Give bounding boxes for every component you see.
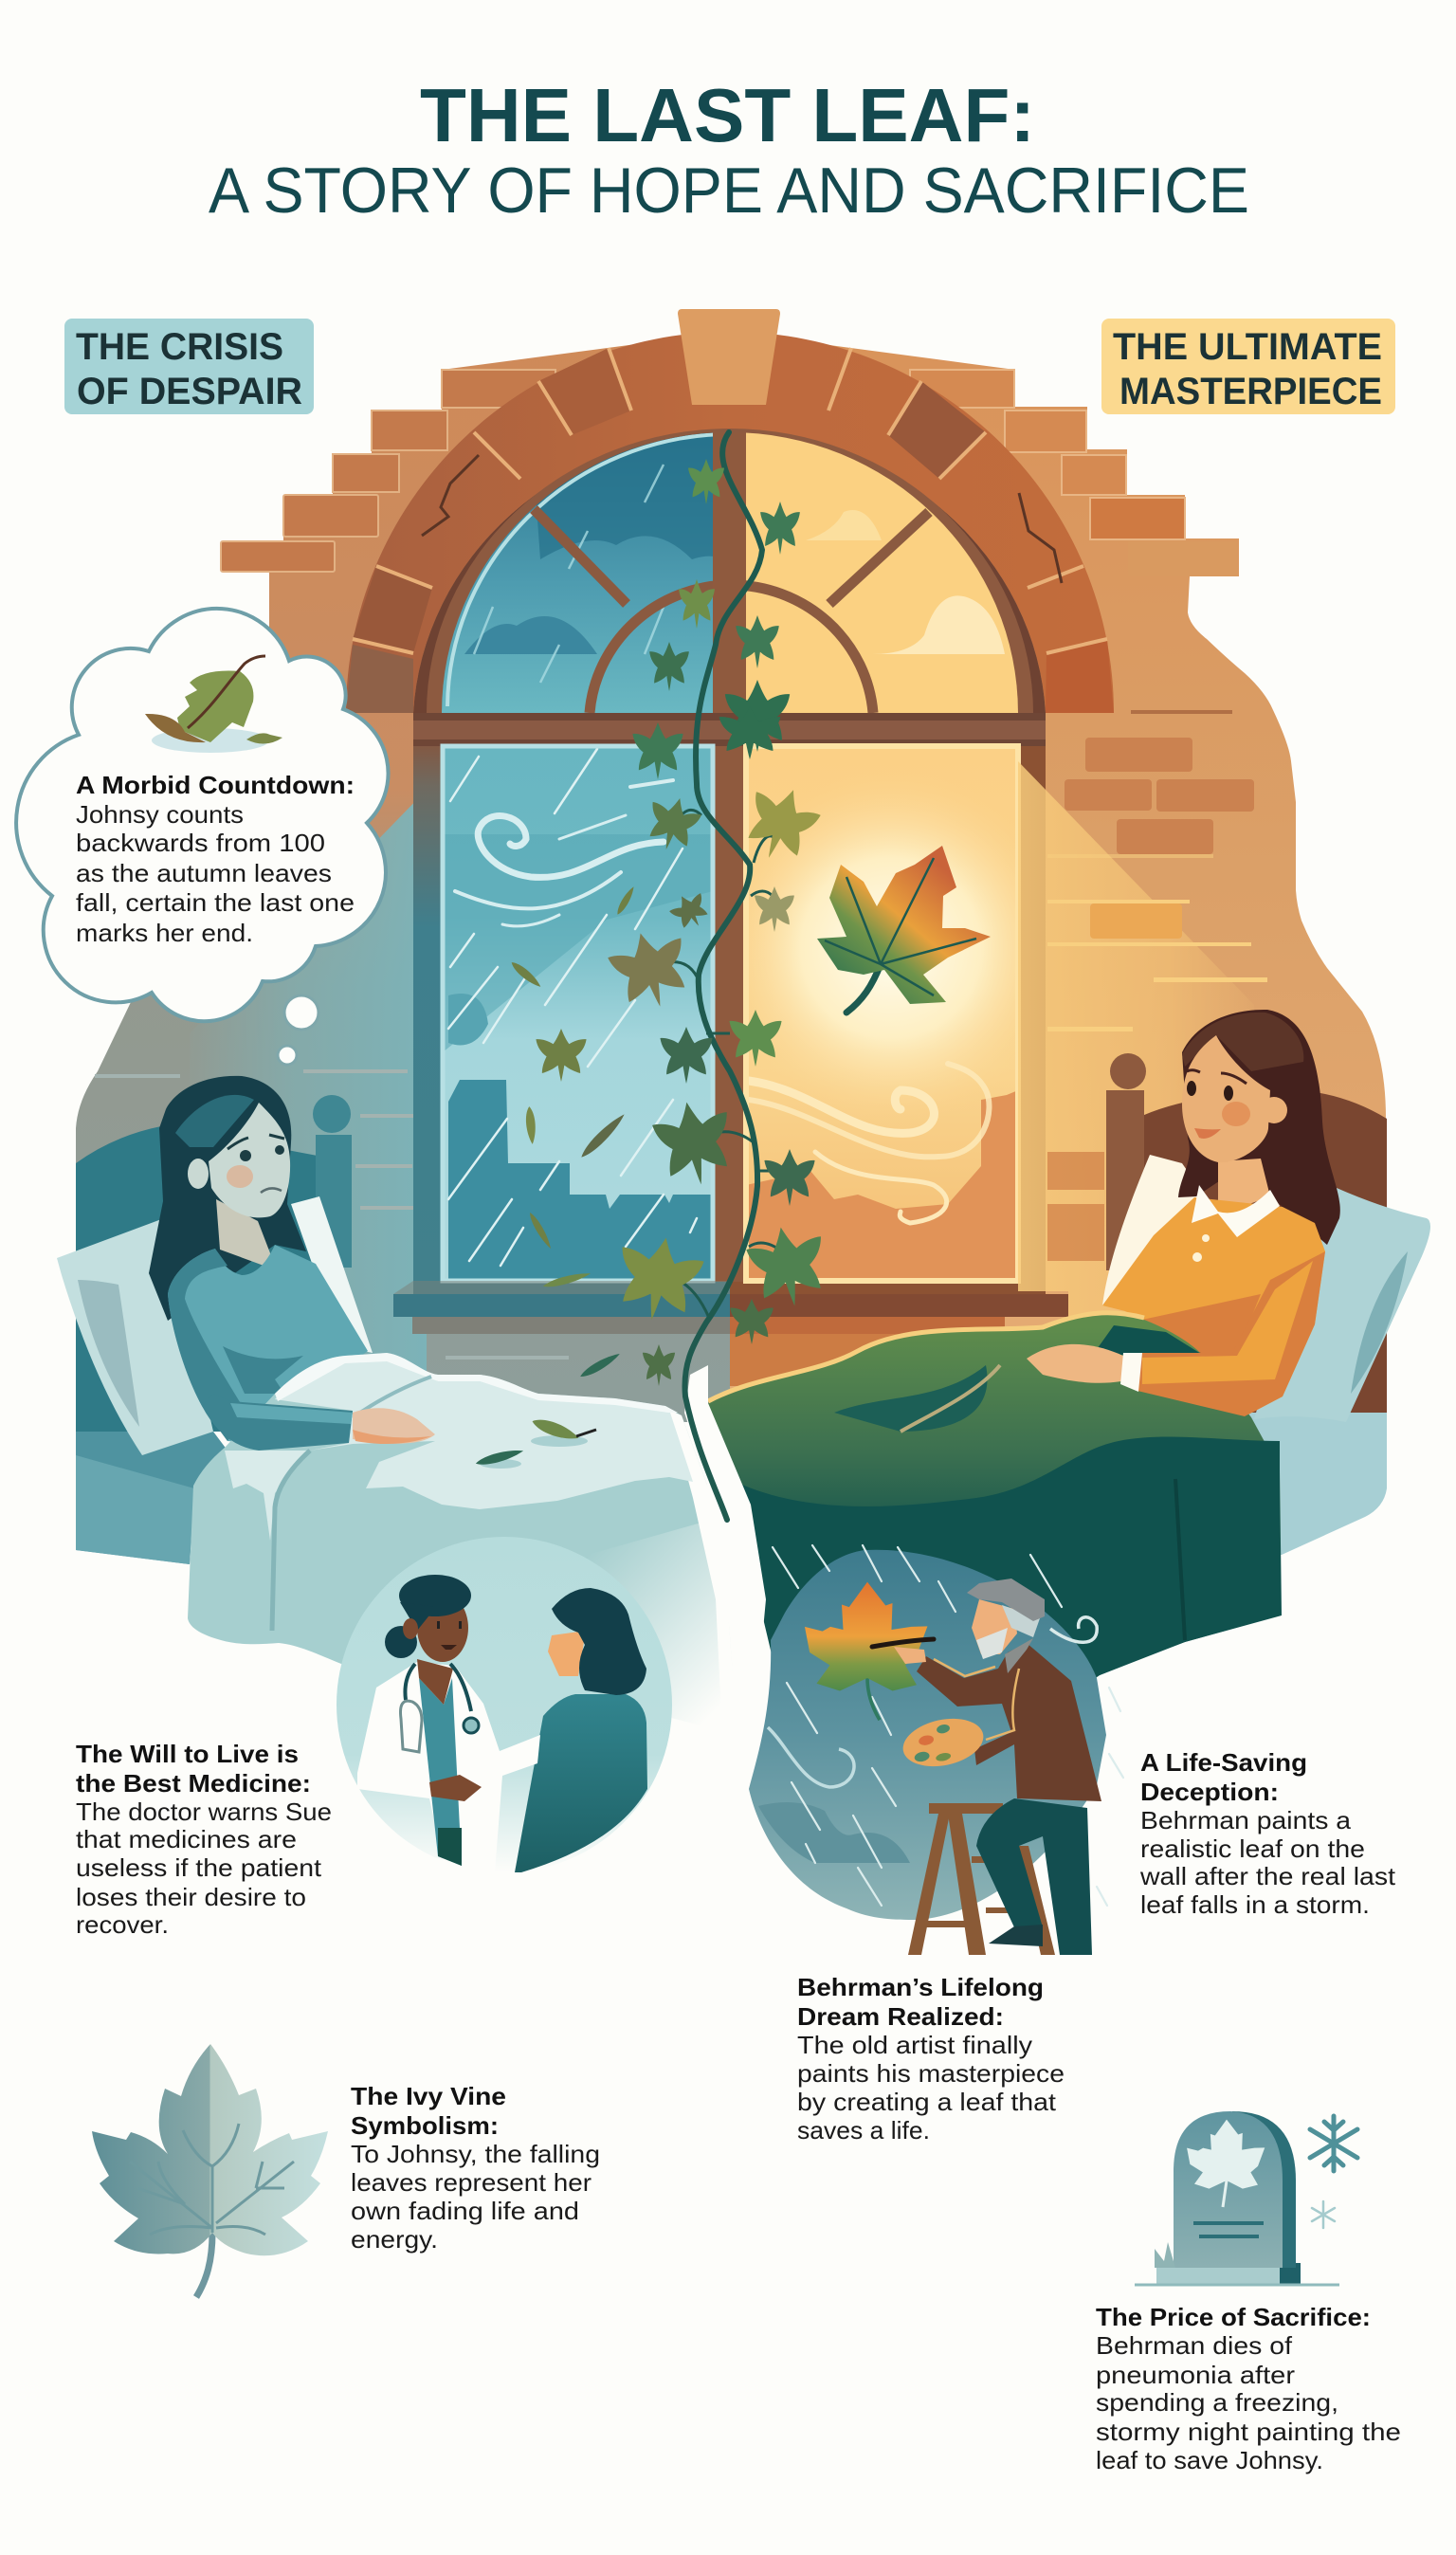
text: the ivy vine symbolism: leaves represent her xyxy=(351,2168,592,2197)
muntins xyxy=(534,509,929,713)
text: a life-saving deception: A Life-Saving xyxy=(1140,1748,1307,1777)
badge: the crisis of despair xyxy=(64,319,314,414)
text: the ivy vine symbolism: Symbolism: xyxy=(351,2111,499,2140)
hair xyxy=(149,1076,306,1321)
ivy leaves: upper xyxy=(632,459,800,779)
right blanket xyxy=(708,1251,1325,1716)
text: the price of sacrifice: spending a freezing, xyxy=(1096,2388,1338,2417)
artist hand + brush xyxy=(894,1647,926,1664)
text: the price of sacrifice xyxy=(1096,2303,1401,2474)
badge: the crisis of despair: THE CRISIS xyxy=(76,326,283,368)
collar xyxy=(1192,1185,1280,1237)
icon: fallen leaf xyxy=(145,656,282,753)
thought dots xyxy=(278,995,318,1065)
right woman xyxy=(1102,1010,1340,1416)
beam of warm light xyxy=(1018,761,1270,1346)
sleeve xyxy=(1138,1251,1325,1416)
painted leaf xyxy=(805,1582,927,1720)
text: the will to live: that medicines are xyxy=(76,1825,297,1853)
keystone xyxy=(678,309,780,405)
bricks: left wall xyxy=(95,1069,569,1360)
doctor scene xyxy=(337,1537,672,1872)
window xyxy=(393,427,1071,1386)
dark voussoirs xyxy=(346,348,1114,713)
bricks: left steps xyxy=(221,370,555,572)
text: behrman's lifelong dream: paints his masterpiece xyxy=(797,2059,1065,2088)
clouds left xyxy=(537,432,713,559)
clouds xyxy=(758,1802,910,1863)
bed base xyxy=(1232,1413,1387,1555)
text: a morbid countdown: Johnsy counts xyxy=(76,800,244,829)
badge: the crisis of despair: OF DESPAIR xyxy=(77,371,302,412)
stethoscope xyxy=(405,1664,471,1711)
rain xyxy=(448,749,697,1266)
sheet fold xyxy=(272,1451,310,1631)
artist head xyxy=(972,1599,1017,1654)
title: THE LAST LEAF: xyxy=(420,73,1035,157)
text: behrman's lifelong dream: by creating a leaf that xyxy=(797,2088,1057,2116)
hair xyxy=(1178,1010,1340,1245)
face xyxy=(209,1103,290,1217)
text: a morbid countdown: backwards from 100 xyxy=(76,829,325,857)
icon: large snowflake xyxy=(1310,2116,1357,2171)
thought bubble xyxy=(16,609,389,1021)
ivy leaves: lower xyxy=(610,1096,832,1386)
white rim on sheet edge xyxy=(669,1410,739,1735)
fallen leaves on sheet xyxy=(475,1415,596,1469)
left arm and hand xyxy=(202,1394,435,1451)
brick wall background xyxy=(76,332,1386,1422)
left sheet xyxy=(188,1353,739,1735)
sweater torso xyxy=(1102,1197,1325,1416)
icon: pale maple leaf xyxy=(92,2044,328,2297)
cracks xyxy=(422,455,1062,583)
central white gap xyxy=(684,1365,766,1782)
patient's sister xyxy=(515,1588,647,1872)
text: the ivy vine symbolism: The Ivy Vine xyxy=(351,2082,506,2110)
icon: gravestone xyxy=(1135,2111,1357,2285)
text: a life-saving deception: Behrman paints a xyxy=(1140,1806,1352,1834)
falling leaves xyxy=(509,885,637,1380)
window frame xyxy=(413,432,1046,746)
text: a life-saving deception: realistic leaf on the xyxy=(1140,1834,1365,1863)
wind swirl xyxy=(455,780,673,926)
text: a morbid countdown: A Morbid Countdown: xyxy=(76,771,355,799)
text: behrman's lifelong dream: Behrman’s Lifelong xyxy=(797,1973,1044,2001)
text: the will to live xyxy=(76,1740,332,1939)
bed post xyxy=(316,1135,352,1268)
icon: small snowflake xyxy=(1312,2201,1335,2228)
sleeve cuff xyxy=(1120,1353,1142,1392)
brick arch xyxy=(346,309,1114,713)
doctor xyxy=(357,1575,540,1872)
artist scene xyxy=(749,1545,1123,1955)
text: the ivy vine symbolism: To Johnsy, the falling xyxy=(351,2140,600,2168)
text: the price of sacrifice: Behrman dies of xyxy=(1096,2331,1293,2360)
hand xyxy=(1027,1344,1123,1383)
badge: the ultimate masterpiece xyxy=(1101,319,1395,414)
bed base xyxy=(76,1432,228,1564)
lit bricks xyxy=(1047,854,1267,1031)
face xyxy=(1182,1035,1270,1162)
headboard xyxy=(76,1126,322,1432)
bricks: right steps xyxy=(910,370,1237,576)
badge: the ultimate masterpiece: MASTERPIECE xyxy=(1119,371,1382,412)
white pillow xyxy=(1102,1155,1204,1308)
left bed xyxy=(57,1095,373,1564)
blue pillow xyxy=(1254,1188,1430,1422)
text: behrman's lifelong dream: Dream Realized: xyxy=(797,2002,1004,2031)
text: the will to live: loses their desire to xyxy=(76,1883,306,1911)
badge: the ultimate masterpiece: THE ULTIMATE xyxy=(1113,326,1382,368)
left beam of cold light xyxy=(190,790,427,1375)
artist legs xyxy=(976,1798,1092,1955)
text: a morbid countdown: as the autumn leaves xyxy=(76,859,332,887)
text: behrman's lifelong dream: saves a life. xyxy=(797,2116,930,2144)
text: behrman's lifelong dream: The old artist finally xyxy=(797,2031,1032,2059)
text: a morbid countdown: marks her end. xyxy=(76,919,253,947)
subtitle: A STORY OF HOPE AND SACRIFICE xyxy=(209,155,1249,227)
text: the will to live: useless if the patient xyxy=(76,1853,322,1882)
headboard xyxy=(1136,1093,1387,1432)
glowing autumn leaf xyxy=(817,846,991,1013)
text: the ivy vine symbolism xyxy=(351,2082,600,2254)
text: a life-saving deception: leaf falls in a storm. xyxy=(1140,1890,1370,1919)
text: a morbid countdown: fall, certain the last one xyxy=(76,888,355,917)
neck xyxy=(216,1199,277,1270)
text: the price of sacrifice: leaf to save Johnsy. xyxy=(1096,2446,1323,2474)
bricks: right wall xyxy=(1065,710,1254,854)
text: the will to live: the Best Medicine: xyxy=(76,1769,311,1798)
artist jacket xyxy=(917,1643,1101,1801)
text: the ivy vine symbolism: energy. xyxy=(351,2225,438,2254)
text: a life-saving deception: wall after the real last xyxy=(1139,1862,1396,1890)
text: a life-saving deception xyxy=(1139,1748,1396,1919)
left woman xyxy=(149,1076,368,1446)
text: the will to live: The Will to Live is xyxy=(76,1740,299,1768)
right side fade xyxy=(588,1517,737,1735)
right bed xyxy=(1102,1053,1430,1555)
text: behrman's lifelong dream xyxy=(797,1973,1065,2144)
sweater torso xyxy=(168,1245,368,1446)
ivy leaves: middle xyxy=(604,778,826,1084)
glass: upper left xyxy=(442,427,1018,713)
text: the will to live: The doctor warns Sue xyxy=(76,1798,332,1826)
white pillow xyxy=(291,1196,373,1353)
stool xyxy=(908,1803,1055,1955)
bed post xyxy=(1106,1090,1144,1270)
text: a morbid countdown xyxy=(76,771,355,947)
palette xyxy=(899,1712,988,1773)
clouds right xyxy=(872,595,1005,654)
text: the price of sacrifice: stormy night painting the xyxy=(1096,2418,1401,2446)
text: the price of sacrifice: pneumonia after xyxy=(1096,2361,1295,2389)
text: the will to live: recover. xyxy=(76,1910,169,1939)
swirl xyxy=(768,1727,854,1787)
neck xyxy=(1218,1159,1270,1215)
top of sheet xyxy=(275,1359,693,1509)
ivy vine xyxy=(509,432,832,1520)
rain xyxy=(773,1545,1123,1906)
glass: lower left storm pane xyxy=(443,746,713,1281)
title xyxy=(209,73,1249,227)
text: the price of sacrifice: The Price of Sacrifice: xyxy=(1096,2303,1371,2331)
blue pillow xyxy=(57,1218,213,1455)
text: the ivy vine symbolism: own fading life and xyxy=(351,2197,579,2225)
text: a life-saving deception: Deception: xyxy=(1140,1778,1279,1806)
sill xyxy=(393,1281,730,1294)
left sheet drape xyxy=(225,1451,308,1541)
glass: lower right sunny pane xyxy=(749,749,1015,1278)
